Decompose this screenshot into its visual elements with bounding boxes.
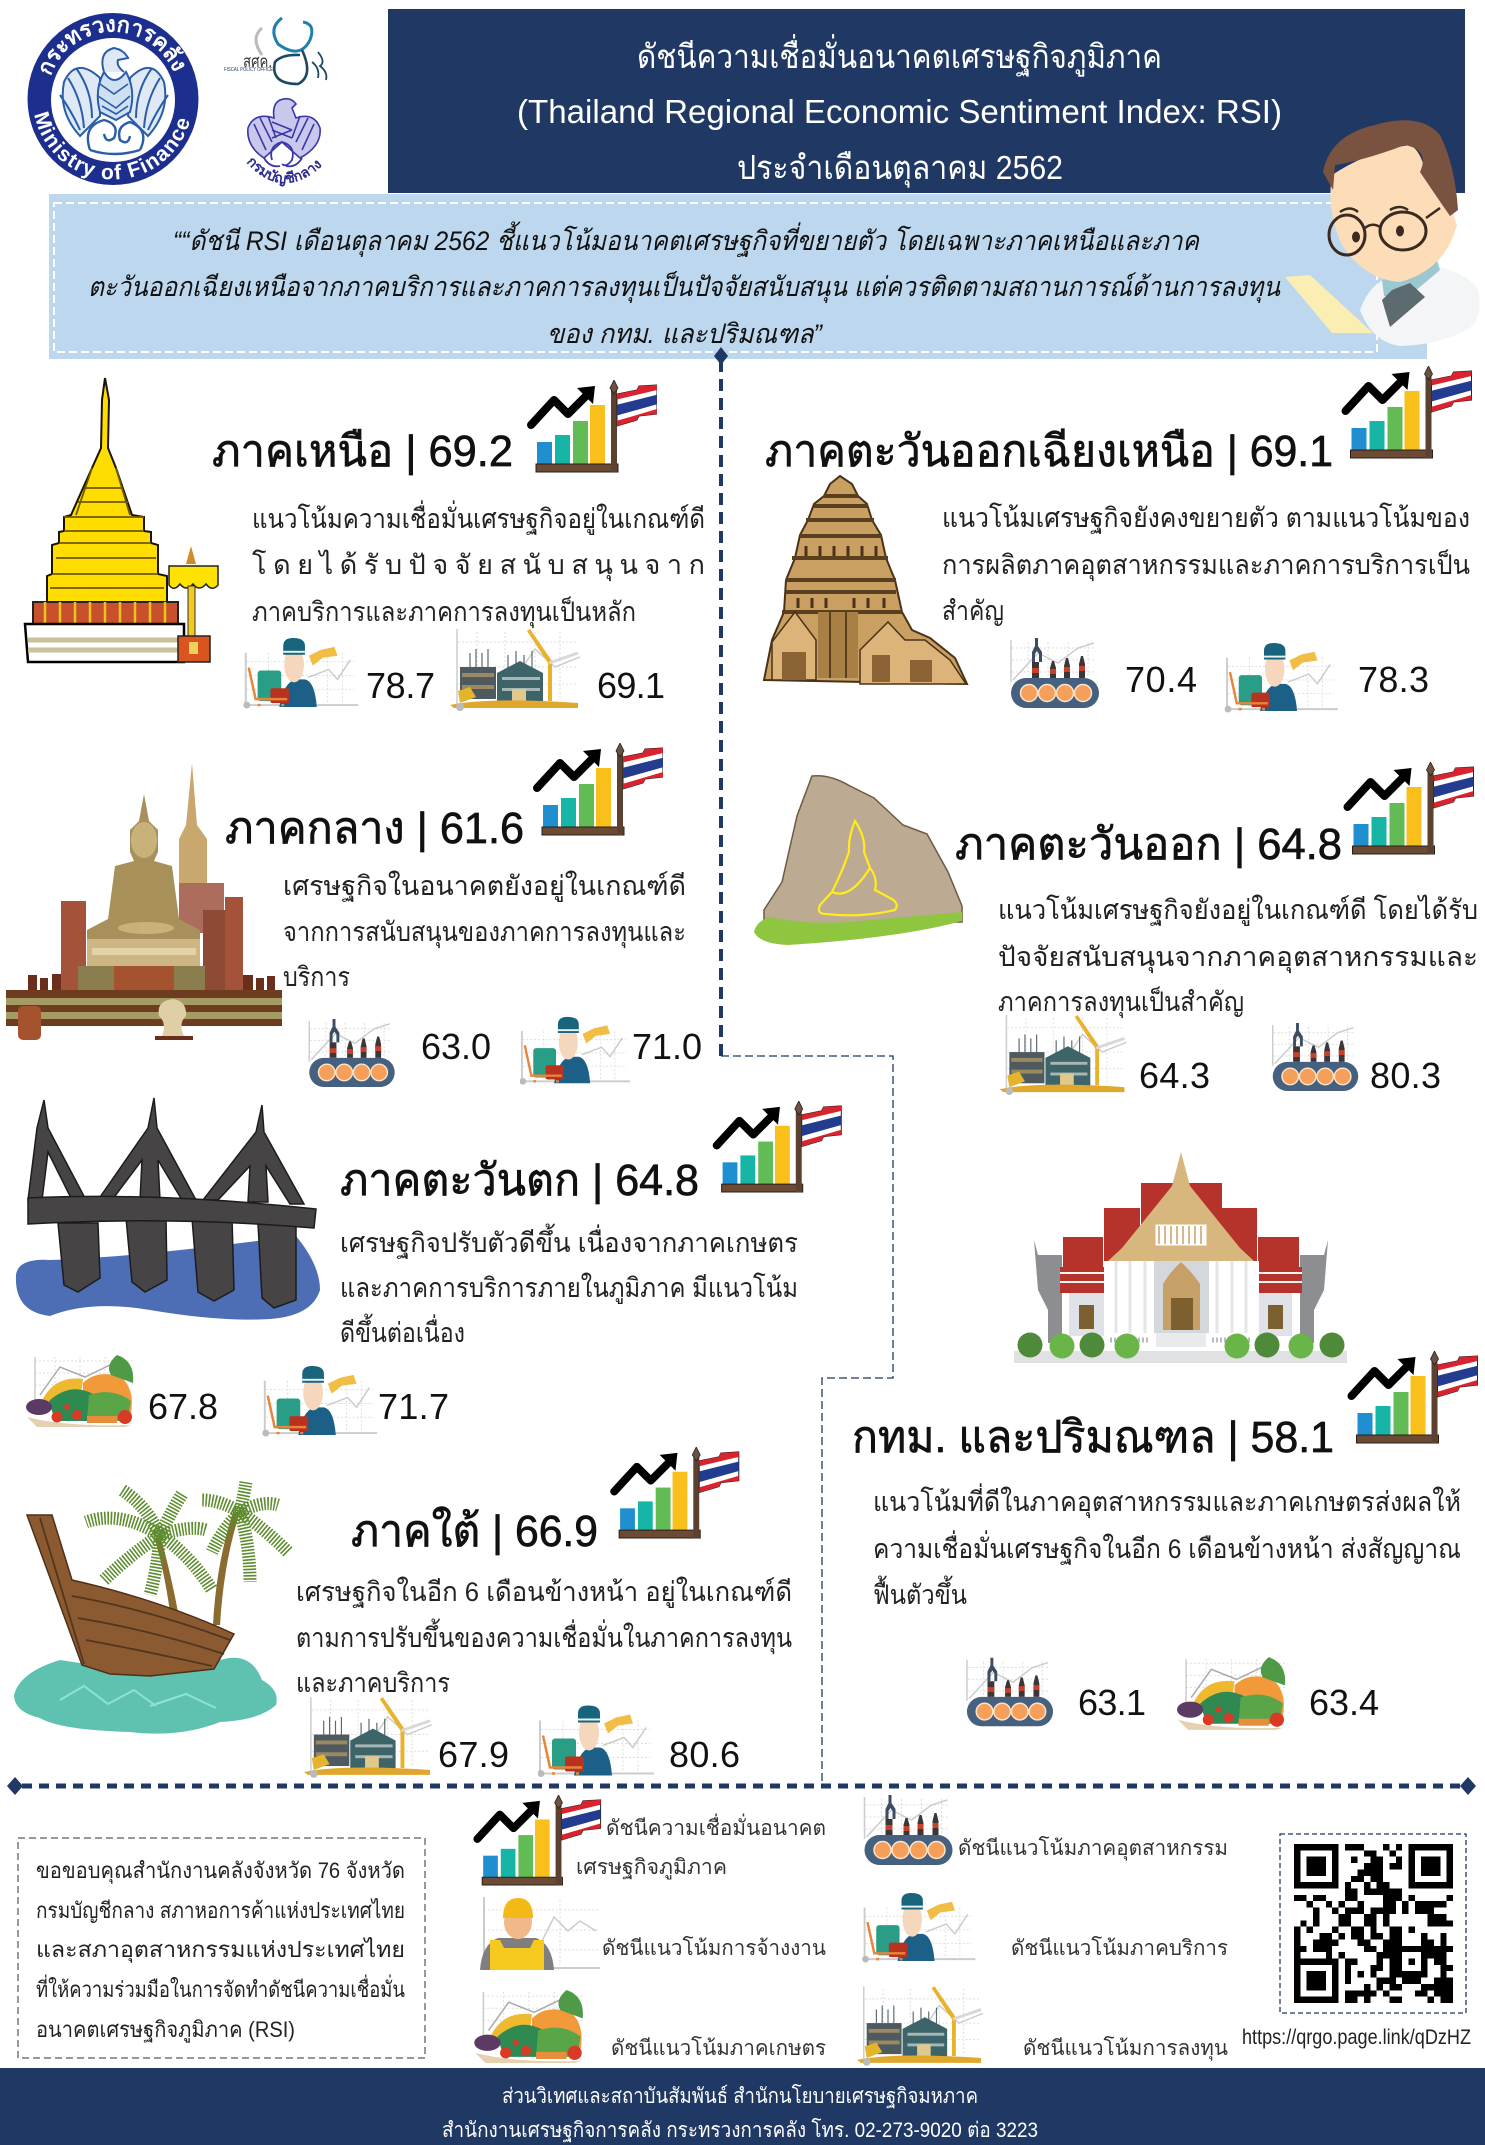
description: [873, 1483, 1461, 1610]
panel: northeast: [764, 366, 1472, 713]
acknowledgement box: ขอขอบคุณสำนักงานคลังจังหวัด 76 จังหวัด: [36, 1858, 405, 1884]
illustration: Rama VIII style bridge: [16, 1098, 320, 1320]
metric: investment: 69.1: [597, 665, 665, 706]
logo: Comptroller General: [246, 98, 322, 186]
metric: agriculture: [26, 1355, 218, 1427]
legend item: services: [862, 1893, 1228, 1963]
metric: services: [520, 1017, 702, 1085]
panel: central: [6, 743, 702, 1087]
metric: services: 78.3: [1358, 659, 1429, 700]
metric: services: 80.6: [669, 1734, 740, 1775]
metric: investment: 67.9: [438, 1734, 509, 1775]
heading: ภาคตะวันออก | 64.8: [955, 820, 1342, 869]
icon: RSI chart: [1348, 762, 1474, 854]
metric: services: [538, 1706, 740, 1777]
legend item: RSI: เศรษฐกิจภูมิภาค: [576, 1856, 727, 1880]
metric: services: 78.7: [366, 665, 435, 706]
logo: Comptroller General: กรมบัญชีกลาง: [246, 158, 322, 186]
legend item: industry: [864, 1795, 1228, 1865]
quote line 1: ““ดัชนี RSI เดือนตุลาคม 2562 ชี้แนวโน้มอนาคตเศรษฐกิจที่ขยายตัว โดยเฉพาะภาคเหนือและภาค: [173, 221, 1200, 258]
legend item: RSI: ดัชนีความเชื่อมั่นอนาคต: [606, 1813, 826, 1840]
quote line 3: ของ กทม. และปริมณฑล”: [547, 319, 823, 349]
acknowledgement box: กรมบัญชีกลาง สภาหอการค้าแห่งประเทศไทย: [36, 1898, 405, 1923]
footer: [0, 2068, 1485, 2145]
description: [340, 1223, 798, 1348]
logo: Ministry of Finance: Ministry of Finance: [34, 111, 189, 180]
description: ดีขึ้นต่อเนื่อง: [340, 1313, 465, 1348]
description: [283, 870, 686, 992]
acknowledgement box: [18, 1838, 425, 2058]
title line 3: ประจำเดือนตุลาคม 2562: [737, 149, 1063, 188]
legend item: agriculture: ดัชนีแนวโน้มภาคเกษตร: [611, 2036, 826, 2060]
logo: SEPO: สศค.: [243, 52, 272, 71]
logo: Ministry of Finance: กระทรวงการคลัง: [40, 18, 184, 76]
footer: สำนักงานเศรษฐกิจการคลัง กระทรวงการคลัง โทร. 02-273-9020 ต่อ 3223: [442, 2118, 1038, 2142]
metric: agriculture: 67.8: [148, 1386, 218, 1427]
title line 1: ดัชนีความเชื่อมั่นอนาคตเศรษฐกิจภูมิภาค: [637, 34, 1162, 77]
heading: ภาคเหนือ | 69.2: [212, 427, 513, 476]
description: [942, 503, 1470, 626]
acknowledgement box: อนาคตเศรษฐกิจภูมิภาค (RSI): [36, 2017, 295, 2043]
legend item: investment: [857, 1986, 1228, 2066]
legend: [474, 1795, 1228, 2066]
panel: south: [14, 1447, 792, 1778]
heading: ภาคใต้ | 66.9: [351, 1506, 598, 1556]
description: ฟื้นตัวขึ้น: [873, 1575, 967, 1610]
description: [296, 1576, 792, 1698]
description: [998, 894, 1478, 1019]
description: เศรษฐกิจในอนาคตยังอยู่ในเกณฑ์ดี: [283, 870, 686, 902]
description: สำคัญ: [942, 596, 1004, 626]
metric: services: [262, 1366, 449, 1437]
panel: east: [754, 762, 1478, 1096]
metric: industry: 70.4: [1125, 659, 1197, 700]
metric: agriculture: [1177, 1657, 1379, 1730]
icon: RSI chart: [1346, 366, 1472, 458]
metric: industry: [309, 1019, 491, 1087]
metric: investment: 64.3: [1139, 1055, 1210, 1096]
acknowledgement box: และสภาอุตสาหกรรมแห่งประเทศไทย: [36, 1937, 405, 1963]
icon: RSI chart: [537, 743, 663, 835]
icon: RSI chart: [1352, 1351, 1478, 1443]
illustration: rock Buddha: [754, 776, 962, 945]
description: ตามการปรับขึ้นของความเชื่อมั่นในภาคการลงทุน: [296, 1618, 792, 1655]
icon: RSI chart: [614, 1447, 739, 1538]
legend item: industry: ดัชนีแนวโน้มภาคอุตสาหกรรม: [958, 1836, 1228, 1861]
legend item: agriculture: [474, 1990, 826, 2063]
metric: industry: 63.1: [1078, 1682, 1146, 1723]
description: ปัจจัยสนับสนุนจากภาคอุตสาหกรรมและ: [998, 942, 1478, 974]
description: ภาคบริการและภาคการลงทุนเป็นหลัก: [252, 594, 636, 629]
description: บริการ: [283, 962, 350, 992]
legend item: RSI: [477, 1795, 826, 1885]
icon: RSI chart: [717, 1101, 841, 1192]
logo: Ministry of Finance: [28, 13, 198, 185]
header banner: [388, 9, 1465, 193]
panel: west: [16, 1098, 841, 1437]
acknowledgement box: ที่ให้ความร่วมมือในการจัดทำดัชนีความเชื่อมั่น: [36, 1974, 405, 2002]
description: และภาคบริการ: [296, 1668, 450, 1698]
legend item: services: ดัชนีแนวโน้มภาคบริการ: [1011, 1936, 1228, 1960]
metric: services: 71.0: [632, 1026, 702, 1067]
metric: investment: [304, 1697, 509, 1778]
title line 2: (Thailand Regional Economic Sentiment Index: RSI): [517, 93, 1282, 130]
metric: investment: [450, 629, 665, 711]
metric: services: [1225, 643, 1429, 713]
icon: doctor illustration: [1285, 120, 1480, 346]
metric: investment: [1000, 1015, 1210, 1096]
metric: industry: [1273, 1023, 1441, 1096]
QR code: [1280, 1834, 1466, 2013]
logo: SEPO: FISCAL POLICY OFFICE: [224, 67, 274, 73]
metric: agriculture: 63.4: [1309, 1682, 1379, 1723]
metric: industry: [1011, 638, 1197, 708]
metric: industry: 80.3: [1370, 1055, 1441, 1096]
panel: Bangkok and vicinity: [852, 1152, 1478, 1730]
description: [252, 500, 705, 629]
heading: ภาคตะวันตก | 64.8: [340, 1156, 699, 1205]
description: จากการสนับสนุนของภาคการลงทุนและ: [283, 917, 686, 949]
illustration: Marble Temple: [1014, 1152, 1347, 1363]
footer: ส่วนวิเทศและสถาบันสัมพันธ์ สำนักนโยบายเศรษฐกิจมหภาค: [502, 2084, 978, 2108]
metric: industry: 63.0: [421, 1026, 491, 1067]
legend item: employment: ดัชนีแนวโน้มการจ้างงาน: [602, 1936, 826, 1960]
illustration: seated Buddha: [6, 763, 282, 1040]
dashed divider: central axis: [714, 347, 893, 1782]
description: เศรษฐกิจในอีก 6 เดือนข้างหน้า อยู่ในเกณฑ์ดี: [296, 1576, 792, 1608]
description: เศรษฐกิจปรับตัวดีขึ้น เนื่องจากภาคเกษตร: [340, 1223, 798, 1259]
metric: services: 71.7: [378, 1386, 449, 1427]
panel: north: [25, 378, 705, 711]
quote box: [49, 194, 1427, 359]
heading: ภาคกลาง | 61.6: [225, 804, 524, 853]
heading: ภาคตะวันออกเฉียงเหนือ | 69.1: [765, 427, 1333, 476]
icon: RSI chart: [531, 380, 657, 472]
logo: SEPO: [224, 18, 326, 84]
illustration: Phimai temple: [764, 476, 967, 684]
metric: industry: [967, 1658, 1146, 1726]
metric: services: [243, 638, 435, 709]
quote line 2: ตะวันออกเฉียงเหนือจากภาคบริการและภาคการลงทุนเป็นปัจจัยสนับสนุน แต่ควรติดตามสถานการณ์ด้านการลงทุน: [88, 271, 1281, 304]
illustration: golden stupa: [25, 378, 218, 662]
description: และภาคการบริการภายในภูมิภาค มีแนวโน้ม: [340, 1272, 798, 1304]
heading: กทม. และปริมณฑล | 58.1: [852, 1413, 1334, 1462]
description: ภาคการลงทุนเป็นสำคัญ: [998, 984, 1244, 1019]
description: แนวโน้มความเชื่อมั่นเศรษฐกิจอยู่ในเกณฑ์ดี: [252, 500, 705, 535]
dashed divider: bottom: [7, 1777, 1476, 1795]
description: โดยได้รับปัจจัยสนับสนุนจาก: [252, 550, 705, 582]
legend item: employment: [480, 1897, 826, 1970]
illustration: long-tail boat and palms: [14, 1482, 288, 1734]
legend item: investment: ดัชนีแนวโน้มการลงทุน: [1023, 2036, 1228, 2061]
